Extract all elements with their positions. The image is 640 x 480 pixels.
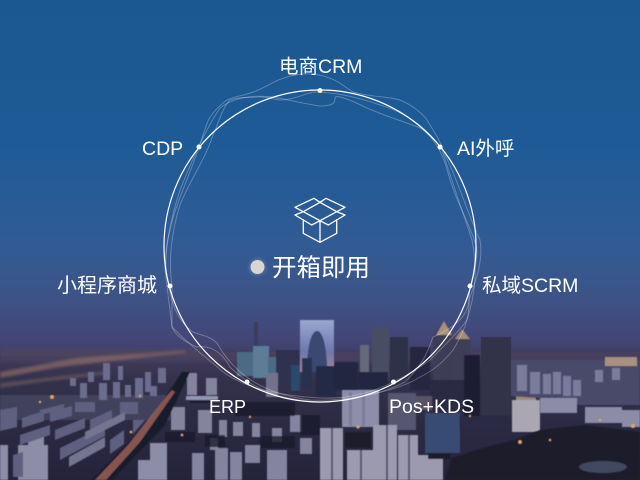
label: 电商CRM: 电商CRM xyxy=(279,56,362,78)
wavy decorative ring lines xyxy=(165,74,481,402)
label: Pos+KDS: Pos+KDS xyxy=(389,396,474,418)
label: 私域SCRM: 私域SCRM xyxy=(482,275,578,297)
label: ERP: ERP xyxy=(209,397,246,417)
label: AI外呼: AI外呼 xyxy=(457,138,514,160)
left districts xyxy=(0,363,320,480)
glowing orb xyxy=(248,258,266,276)
far right suburbs xyxy=(445,357,640,480)
horizon haze and streets xyxy=(0,349,640,388)
label: 小程序商城: 小程序商城 xyxy=(57,275,157,297)
right towers xyxy=(320,321,540,480)
node dots xyxy=(168,88,472,384)
main ring xyxy=(164,90,476,402)
icon: open box xyxy=(295,198,345,242)
label: CDP: CDP xyxy=(142,138,183,160)
central towers xyxy=(237,320,358,397)
city lights xyxy=(39,395,635,444)
center title: 开箱即用: 开箱即用 xyxy=(272,255,370,282)
